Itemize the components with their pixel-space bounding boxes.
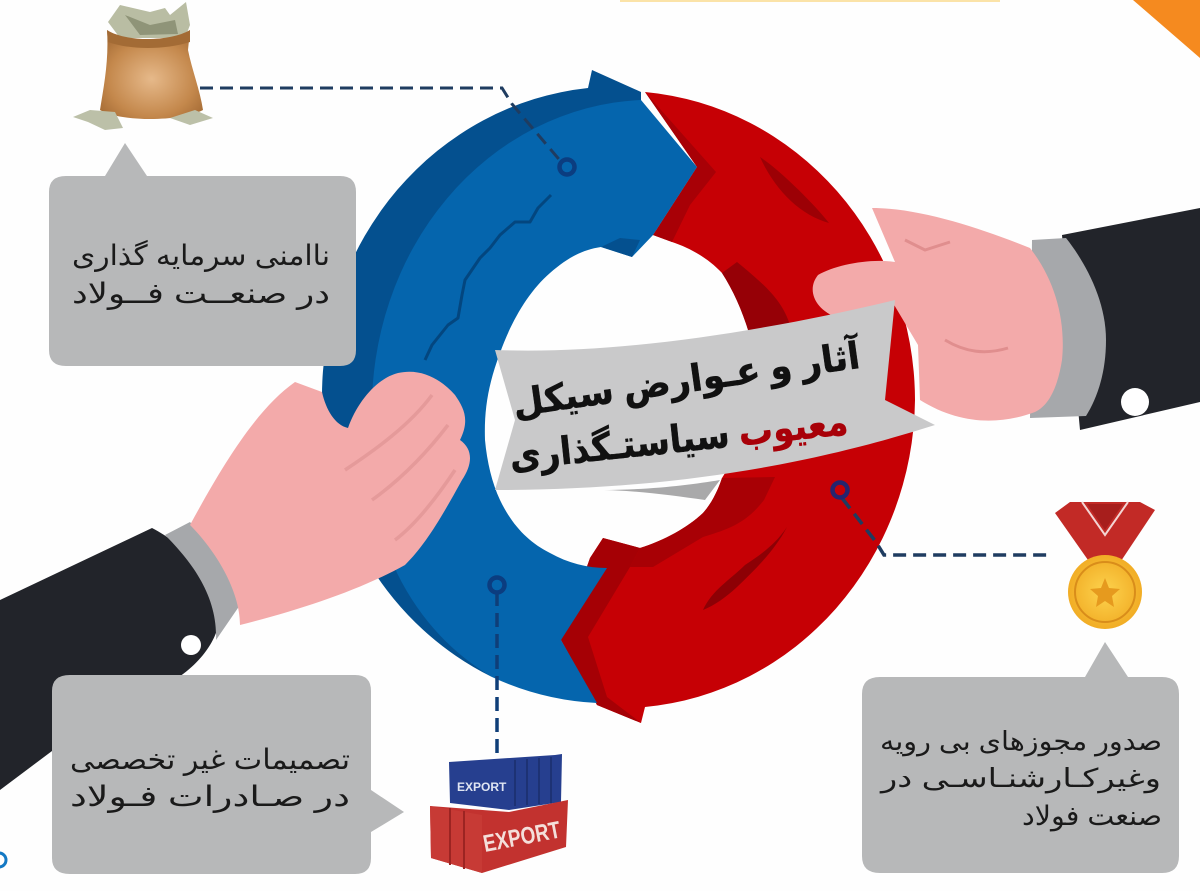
panel text: در صنعــت فــولاد <box>72 278 330 310</box>
circular arrows ring <box>322 70 915 723</box>
crack <box>425 195 551 360</box>
marker: blue bottom dot <box>490 578 504 592</box>
center ribbon banner <box>495 300 935 500</box>
icon: medal <box>1055 502 1155 629</box>
red arrow segment <box>561 92 915 723</box>
icon: export containers <box>430 754 568 873</box>
panel text: ناامنی سرمایه گذاری <box>72 239 330 272</box>
marker: blue top dot <box>560 160 574 174</box>
panel text: صدور مجوزهای بی رویه <box>880 726 1162 757</box>
blue arrow segment <box>322 70 697 703</box>
icon: money bag <box>73 2 213 130</box>
panel text <box>72 239 330 310</box>
left hand with sleeve <box>0 372 470 790</box>
panel: non-expert decisions <box>52 675 404 874</box>
marker: red dot <box>832 482 848 498</box>
panel text: صنعت فولاد <box>1022 801 1162 832</box>
banner subtitle: معیوب سیاستـگذاری <box>507 399 850 479</box>
panel text: در صـادرات فـولاد <box>70 781 350 813</box>
top accent: orange corner <box>620 0 1200 58</box>
panel: irregular permits <box>862 642 1179 873</box>
icon: export containers: EXPORT <box>457 780 507 794</box>
right hand with sleeve <box>813 208 1200 430</box>
banner title: آثار و عـوارض سیکل <box>510 332 864 425</box>
panel: investment insecurity <box>49 143 356 366</box>
money bag connector <box>200 88 563 164</box>
icon: export containers: EXPORT <box>481 816 563 858</box>
export connector <box>495 592 499 755</box>
panel text <box>878 726 1162 832</box>
panel text: وغیرکـارشنـاسـی در <box>878 763 1161 794</box>
medal connector <box>842 498 1050 555</box>
panel text <box>70 744 350 813</box>
logo fragment <box>0 853 6 867</box>
panel text: تصمیمات غیر تخصصی <box>70 744 350 776</box>
